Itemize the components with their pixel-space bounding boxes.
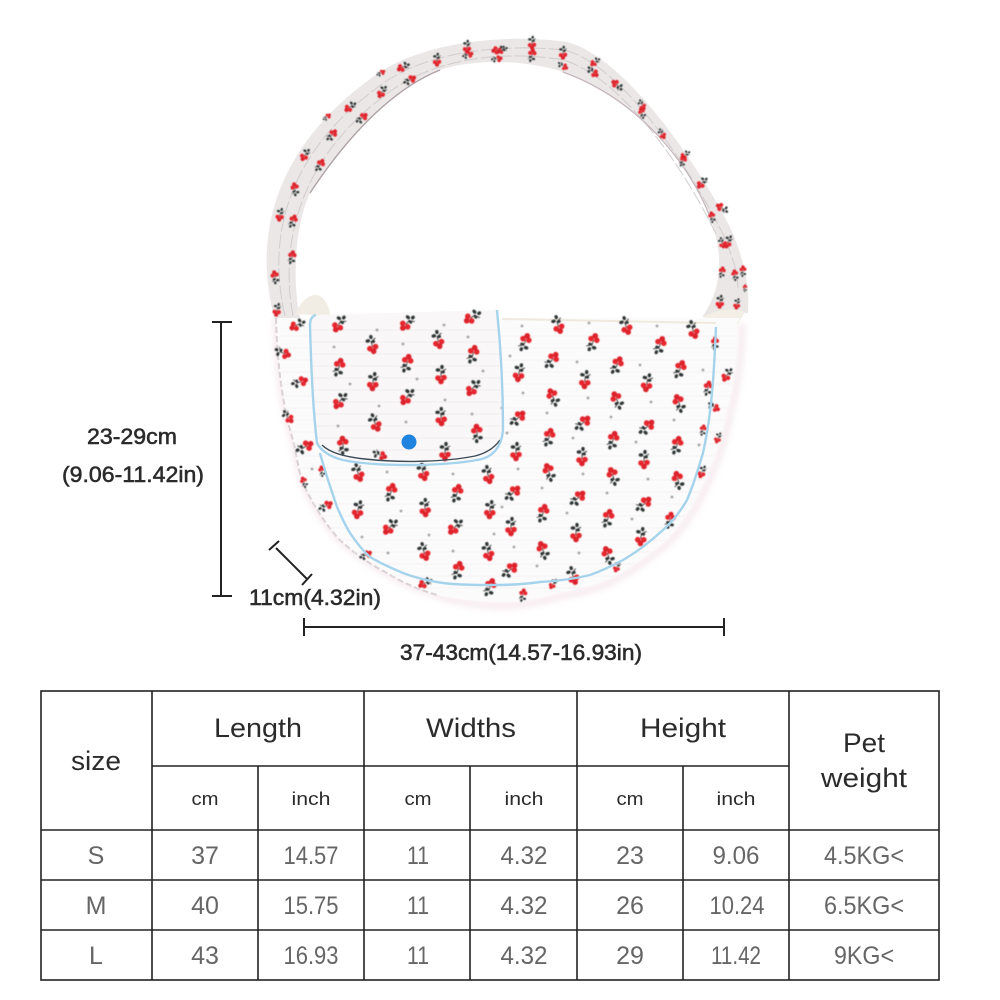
table row S: 4.32 [500,842,548,870]
table header row: size [71,746,121,776]
table row L: 16.93 [284,942,338,970]
table row S [88,842,904,870]
strap knot right [700,310,745,324]
table header row: Pet [843,728,886,758]
body flower print [273,314,735,603]
strap quilting [279,48,738,316]
table header row: inch [716,789,756,809]
table row S: 11 [407,842,429,870]
depth dimension line [269,541,312,585]
strap inner shadow [310,70,440,193]
width label: 37-43cm(14.57-16.93in) [400,640,642,665]
pink edge shadow [276,318,742,606]
table row M: 4.32 [500,892,548,920]
table header row: inch [292,789,330,809]
height label [62,424,204,487]
table row M [86,892,904,920]
table row M: 40 [191,892,219,920]
product photo: pet sling bag [267,36,748,606]
table row L: 43 [191,942,219,970]
table row M: 26 [616,892,644,920]
grey polka dots [311,322,704,567]
table row L: L [89,942,103,970]
width dimension line [304,618,724,636]
bag body [276,318,740,602]
strap flower print [270,36,747,317]
table grid [41,691,939,980]
table row L: 4.32 [500,942,548,970]
table header row [71,713,908,809]
table row M: 10.24 [710,892,765,920]
table row M: 6.5KG< [824,892,904,920]
table header row: Length [214,713,302,743]
quilting lines [280,336,745,588]
table row L: 29 [616,942,644,970]
height dimension line [212,322,232,596]
table row M: 11 [407,892,429,920]
table row S: 9.06 [712,842,760,870]
bag side band shading [276,318,437,595]
snap button [402,434,416,450]
strap knot left [296,295,330,316]
table header row: cm [192,789,218,809]
table header row: Height [640,713,727,743]
height label: 23-29cm [87,424,177,449]
table row L: 9KG< [834,942,894,970]
table row S: S [88,842,104,870]
flap dots [333,324,503,427]
table header row: cm [404,789,432,809]
top band of body [502,319,716,323]
front flap [310,306,503,465]
table header row: cm [616,789,644,809]
table header row: Widths [426,713,516,743]
table row L: 11.42 [711,942,761,970]
table row S: 23 [616,842,644,870]
flap quilting [312,330,502,450]
carrying strap [267,36,748,320]
table header row: weight [820,763,908,793]
flap flower print [329,306,484,462]
size table [41,691,939,980]
table header row: inch [504,789,544,809]
table row S: 14.57 [284,842,338,870]
flap piping [310,310,503,465]
table row S: 37 [191,842,219,870]
table row L: 11 [407,942,429,970]
table row S: 4.5KG< [824,842,904,870]
table row M: 15.75 [284,892,338,920]
height label: (9.06-11.42in) [62,462,204,487]
table row M: M [86,892,106,920]
table row L [89,942,894,970]
body piping [320,327,716,585]
depth label: 11cm(4.32in) [249,585,381,610]
flap dark underside [322,440,500,461]
